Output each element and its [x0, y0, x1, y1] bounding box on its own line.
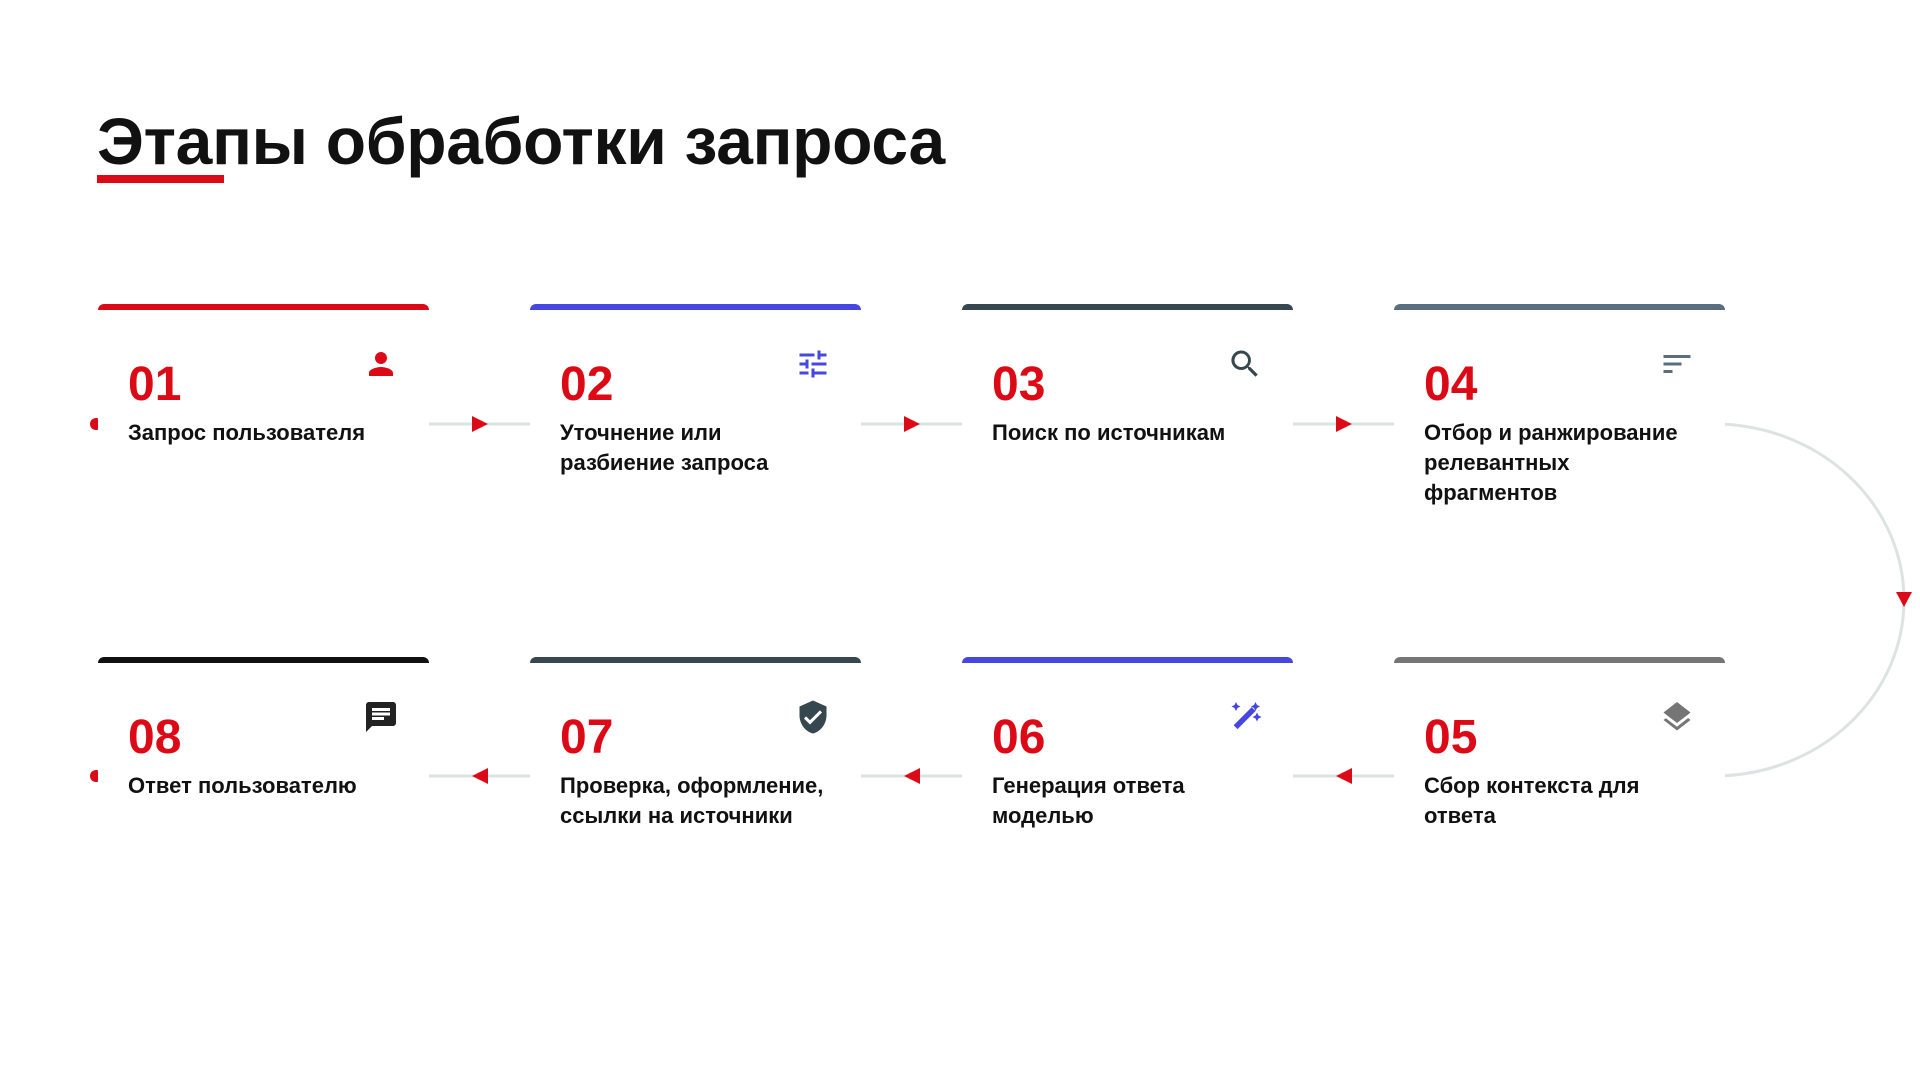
icon: magic wand: [1232, 702, 1262, 729]
card 01: [98, 304, 429, 534]
card 04: [1394, 304, 1725, 534]
card 04: 04: [1424, 358, 1477, 411]
card 08: 08: [128, 711, 181, 764]
icon: sliders: [800, 350, 826, 378]
card 05: Сбор контекста для: [1424, 773, 1640, 798]
card 04: фрагментов: [1424, 480, 1557, 505]
card 07: Проверка, оформление, ссылки на источники: [560, 773, 823, 828]
card 02: 02: [560, 358, 613, 411]
icon: sort: [1664, 355, 1690, 373]
card 03: [962, 304, 1293, 534]
card 06: моделью: [992, 803, 1094, 828]
icon: search: [1231, 350, 1258, 377]
card 06: Генерация ответа: [992, 773, 1185, 798]
icon: shield: [800, 700, 826, 734]
card 04: Отбор и ранжирование: [1424, 420, 1678, 445]
card 02: [530, 304, 861, 534]
card 06: [962, 657, 1293, 887]
card 01: Запрос пользователя: [128, 420, 365, 445]
title: Этапы обработки запроса: [97, 104, 945, 178]
card 08: Ответ пользователю: [128, 773, 357, 798]
card 05: [1394, 657, 1725, 887]
card 03: 03: [992, 358, 1045, 411]
title underline: [97, 175, 224, 183]
card 04: релевантных: [1424, 450, 1569, 475]
icon: chat: [366, 702, 396, 732]
card 08: [98, 657, 429, 887]
card 07: 07: [560, 711, 613, 764]
card 05: 05: [1424, 711, 1477, 764]
icon: layers: [1664, 702, 1690, 730]
card 07: [530, 657, 861, 887]
card 05: ответа: [1424, 803, 1496, 828]
card 02: разбиение запроса: [560, 450, 768, 475]
card 01: 01: [128, 358, 181, 411]
card 03: Поиск по источникам: [992, 420, 1225, 445]
card 06: 06: [992, 711, 1045, 764]
card 02: Уточнение или: [560, 420, 722, 445]
icon: person: [369, 352, 393, 376]
